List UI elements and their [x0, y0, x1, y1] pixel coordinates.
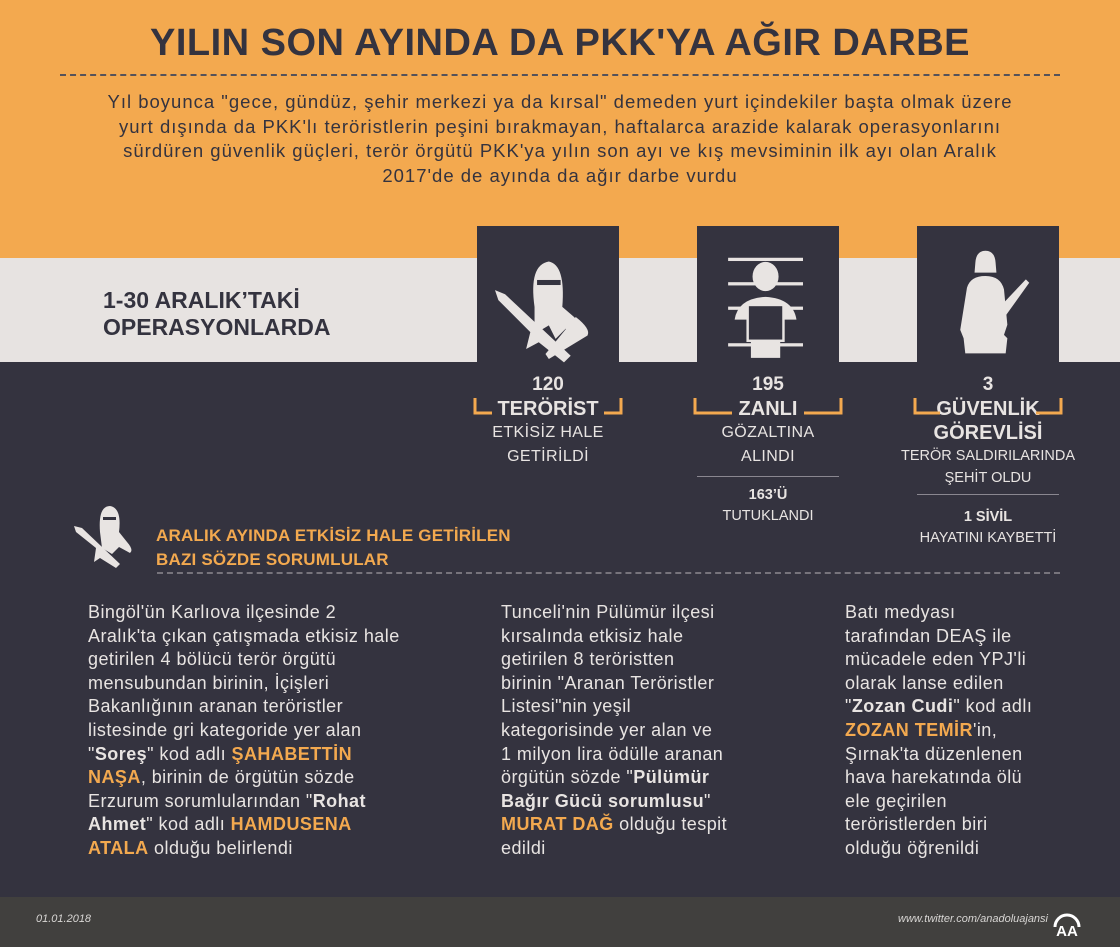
intro text	[107, 91, 1012, 186]
text column 2	[501, 602, 727, 858]
text column 2: örgütün sözde "Pülümür	[501, 767, 709, 787]
stat text: ZANLI	[739, 398, 797, 420]
icon: soldier	[960, 250, 1030, 354]
panel: security stat: 1 SİVİL	[964, 509, 1012, 525]
stat text: GÖZALTINA	[721, 424, 815, 441]
text column 2: Listesi"nin yeşil	[501, 696, 631, 716]
icon: militant	[495, 262, 588, 362]
stat text: ALINDI	[741, 448, 795, 465]
text column 3: mücadele eden YPJ'li	[845, 649, 1026, 669]
intro text: sürdüren güvenlik güçleri, terör örgütü PKK'ya yılın son ayı ve kış mevsiminin ilk ayı olan Aralık	[123, 140, 997, 161]
band heading: 1-30 ARALIK’TAKİ	[103, 287, 300, 313]
text column 3: olarak lanse edilen	[845, 673, 1004, 693]
panel: terrorist stat	[474, 226, 622, 465]
stat text	[721, 374, 815, 465]
panel: security stat: HAYATINI KAYBETTİ	[920, 530, 1056, 546]
text column 2: kategorisinde yer alan ve	[501, 720, 712, 740]
text column 2: edildi	[501, 838, 546, 858]
footer	[0, 897, 1120, 947]
intro text: Yıl boyunca "gece, gündüz, şehir merkezi ya da kırsal" demeden yurt içindekiler başta olmak üzere	[107, 91, 1012, 112]
section heading: BAZI SÖZDE SORUMLULAR	[156, 550, 389, 569]
text column 2: getirilen 8 teröristten	[501, 649, 674, 669]
panel: suspects stat: 163’Ü	[749, 487, 787, 503]
text column 2: birinin "Aranan Teröristler	[501, 673, 714, 693]
icon: detainee	[728, 258, 803, 358]
text column 1: Bakanlığının aranan teröristler	[88, 696, 343, 716]
stat text: GETİRİLDİ	[507, 448, 589, 465]
text column 3: ele geçirilen	[845, 791, 947, 811]
text column 3: Şırnak'ta düzenlenen	[845, 744, 1023, 764]
stat text: GÖREVLİSİ	[934, 422, 1042, 444]
icon: AA logo	[1054, 914, 1080, 939]
stat text: TERÖR SALDIRILARINDA	[901, 448, 1075, 464]
text column 3: Batı medyası	[845, 602, 955, 622]
text column 3: ZOZAN TEMİR'in,	[845, 720, 997, 740]
text column 1: "Soreş" kod adlı ŞAHABETTİN	[88, 744, 352, 764]
text column 2: kırsalında etkisiz hale	[501, 626, 683, 646]
stat text: 195	[752, 374, 784, 395]
text column 2: 1 milyon lira ödülle aranan	[501, 744, 723, 764]
text column 3: tarafından DEAŞ ile	[845, 626, 1012, 646]
text column 2: MURAT DAĞ olduğu tespit	[501, 814, 727, 834]
text column 1: Aralık'ta çıkan çatışmada etkisiz hale	[88, 626, 400, 646]
text column 1: mensubundan birinin, İçişleri	[88, 673, 329, 693]
text column 2: Bağır Gücü sorumlusu"	[501, 791, 711, 811]
stat text: ETKİSİZ HALE	[492, 424, 604, 441]
band heading	[103, 287, 330, 340]
text column 2: Tunceli'nin Pülümür ilçesi	[501, 602, 715, 622]
text column 3: teröristlerden biri	[845, 814, 988, 834]
text column 1: Ahmet" kod adlı HAMDUSENA	[88, 814, 352, 834]
text column 1: listesinde gri kategoride yer alan	[88, 720, 361, 740]
band heading: OPERASYONLARDA	[103, 314, 330, 340]
stat text: 120	[532, 374, 564, 395]
stat text: ŞEHİT OLDU	[945, 470, 1031, 486]
intro text: 2017'de de ayında da ağır darbe vurdu	[382, 164, 738, 186]
panel: security stat	[901, 226, 1075, 546]
stat text: TERÖRİST	[497, 398, 599, 420]
section heading: ARALIK AYINDA ETKİSİZ HALE GETİRİLEN	[156, 526, 511, 545]
intro text: yurt dışında da PKK'lı teröristlerin peşini bırakmayan, haftalarca arazide kalarak operasyonlarını	[119, 116, 1001, 136]
text column 1: Bingöl'ün Karlıova ilçesinde 2	[88, 602, 336, 622]
stat text: GÜVENLİK	[936, 398, 1040, 420]
text column 1	[88, 602, 400, 858]
panel: suspects stat	[694, 226, 842, 524]
section heading	[156, 526, 511, 569]
footer: 01.01.2018	[36, 913, 91, 925]
text column 3: "Zozan Cudi" kod adlı	[845, 696, 1032, 716]
text column 1: ATALA olduğu belirlendi	[88, 838, 293, 858]
text column 1: Erzurum sorumlularından "Rohat	[88, 791, 366, 811]
footer: www.twitter.com/anadoluajansi	[898, 913, 1048, 925]
text column 1: getirilen 4 bölücü terör örgütü	[88, 649, 336, 669]
panel: suspects stat: TUTUKLANDI	[722, 508, 814, 524]
icon: small militant	[74, 506, 132, 568]
stat text	[492, 374, 604, 465]
stat text	[901, 374, 1075, 486]
text column 3: hava harekatında ölü	[845, 767, 1022, 787]
text column 3: olduğu öğrenildi	[845, 838, 979, 858]
text column 1: NAŞA, birinin de örgütün sözde	[88, 767, 355, 787]
stat text: 3	[983, 374, 993, 395]
title: YILIN SON AYINDA DA PKK'YA AĞIR DARBE	[150, 22, 970, 64]
text column 3	[845, 602, 1032, 858]
